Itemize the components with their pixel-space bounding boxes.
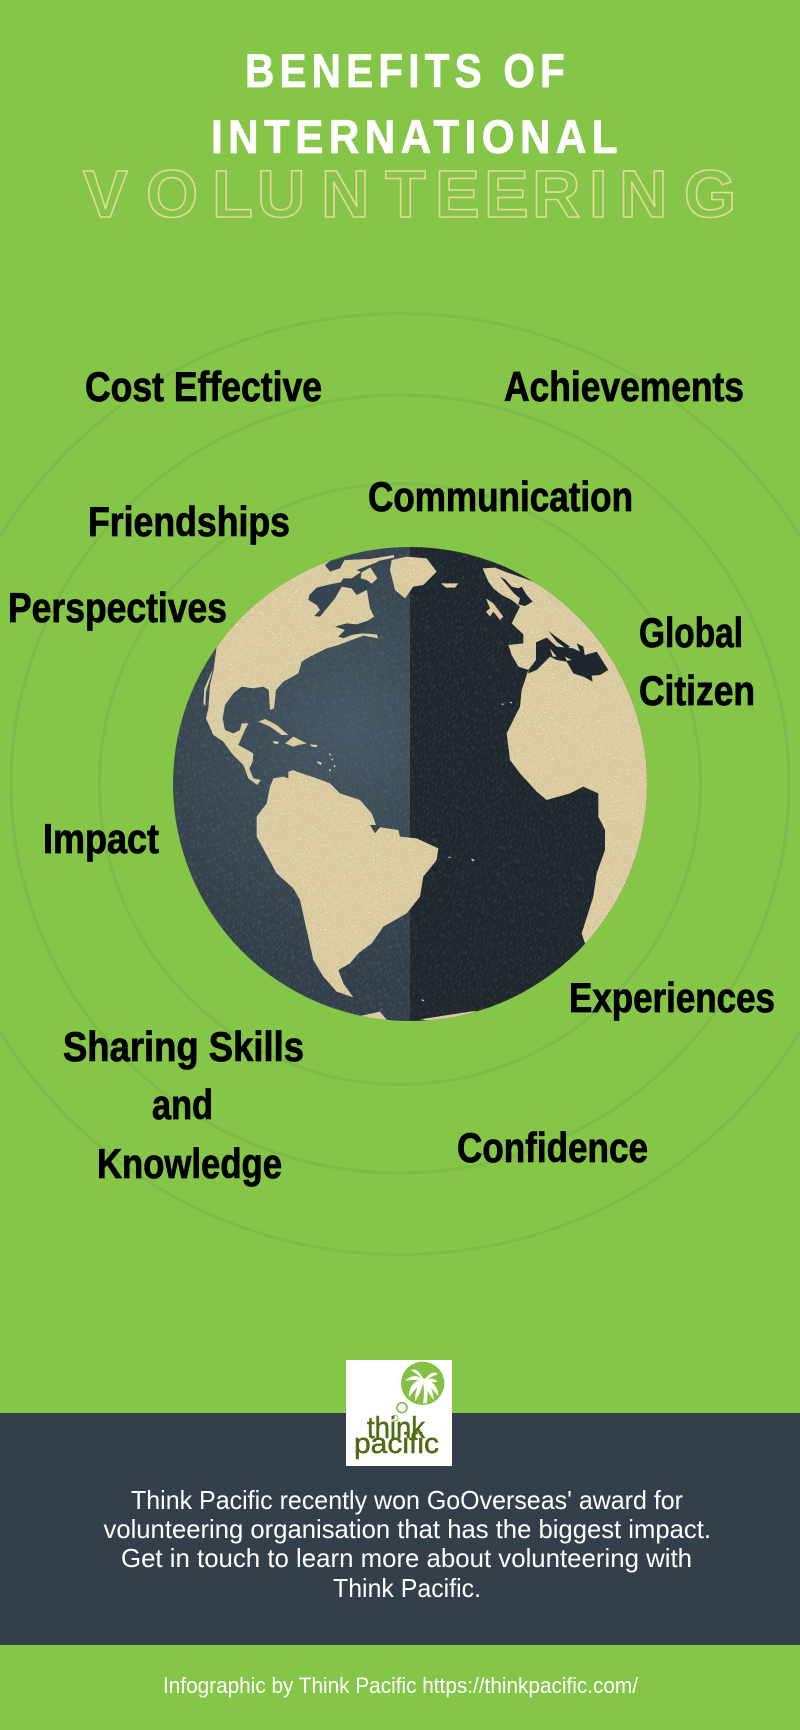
icon: think pacific logo: pacific: [354, 1428, 439, 1460]
label: achievements: Achievements: [504, 363, 744, 410]
label: communication: Communication: [368, 473, 633, 520]
text block: award message: Think Pacific recently won GoOverseas' award for: [131, 1485, 683, 1515]
label: confidence: Confidence: [457, 1124, 648, 1171]
label: global citizen: Citizen: [639, 667, 755, 714]
text block: award message: Think Pacific.: [333, 1573, 481, 1603]
label: friendships: Friendships: [88, 498, 290, 545]
label: perspectives: Perspectives: [8, 584, 227, 631]
globe inland seas: [308, 559, 382, 833]
panel: dark call-to-action band: [0, 1413, 800, 1645]
label: sharing skills and knowledge: [63, 1023, 304, 1187]
text block: award message: volunteering organisation that has the biggest impact.: [104, 1514, 711, 1544]
globe ocean: left half: [170, 540, 410, 1030]
title line: benefits of: BENEFITS OF: [245, 44, 570, 97]
globe ocean: right half: [410, 540, 650, 1030]
text block: award message: Get in touch to learn more about volunteering with: [121, 1543, 692, 1573]
footer credit: Infographic by Think Pacific https://thinkpacific.com/: [163, 1673, 639, 1698]
title: [83, 44, 736, 232]
Europe, Africa and Iceland: [441, 568, 670, 943]
concentric rings behind the globe: [0, 314, 800, 1254]
title line: outlined volunteering: VOLUNTEERING: [83, 157, 736, 232]
South America, Greenland, Antarctica: [257, 557, 477, 1023]
title line: international: INTERNATIONAL: [211, 110, 623, 163]
globe illustration: [173, 547, 647, 1021]
North and Central America: [203, 555, 394, 785]
label: global citizen: [639, 609, 755, 714]
text block: award message: [104, 1485, 711, 1603]
label: impact: Impact: [43, 815, 159, 862]
label: cost effective: Cost Effective: [85, 363, 322, 410]
icon: think pacific logo: think: [367, 1410, 425, 1445]
label: sharing skills and knowledge: and: [152, 1081, 213, 1128]
label: sharing skills and knowledge: Knowledge: [97, 1140, 282, 1187]
icon: think pacific logo: [346, 1360, 452, 1466]
label: sharing skills and knowledge: Sharing Skills: [63, 1023, 304, 1070]
globe continents: [203, 555, 670, 1023]
label: global citizen: Global: [639, 609, 743, 656]
labels around the globe: [8, 363, 775, 1187]
